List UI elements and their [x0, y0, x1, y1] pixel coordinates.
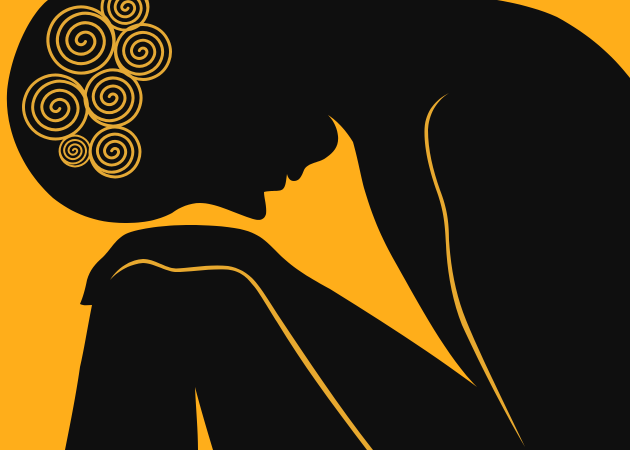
spiral 4 [15, 66, 96, 148]
spiral 7 [55, 131, 95, 171]
back contour line [424, 93, 525, 447]
arm contour line [110, 259, 373, 450]
spiral 6 [83, 120, 147, 184]
spiral 1 [39, 0, 123, 82]
spiral 5 [77, 62, 149, 134]
spiral cluster [15, 0, 178, 184]
spiral 3 [96, 0, 154, 36]
spiral 2 [108, 17, 178, 87]
